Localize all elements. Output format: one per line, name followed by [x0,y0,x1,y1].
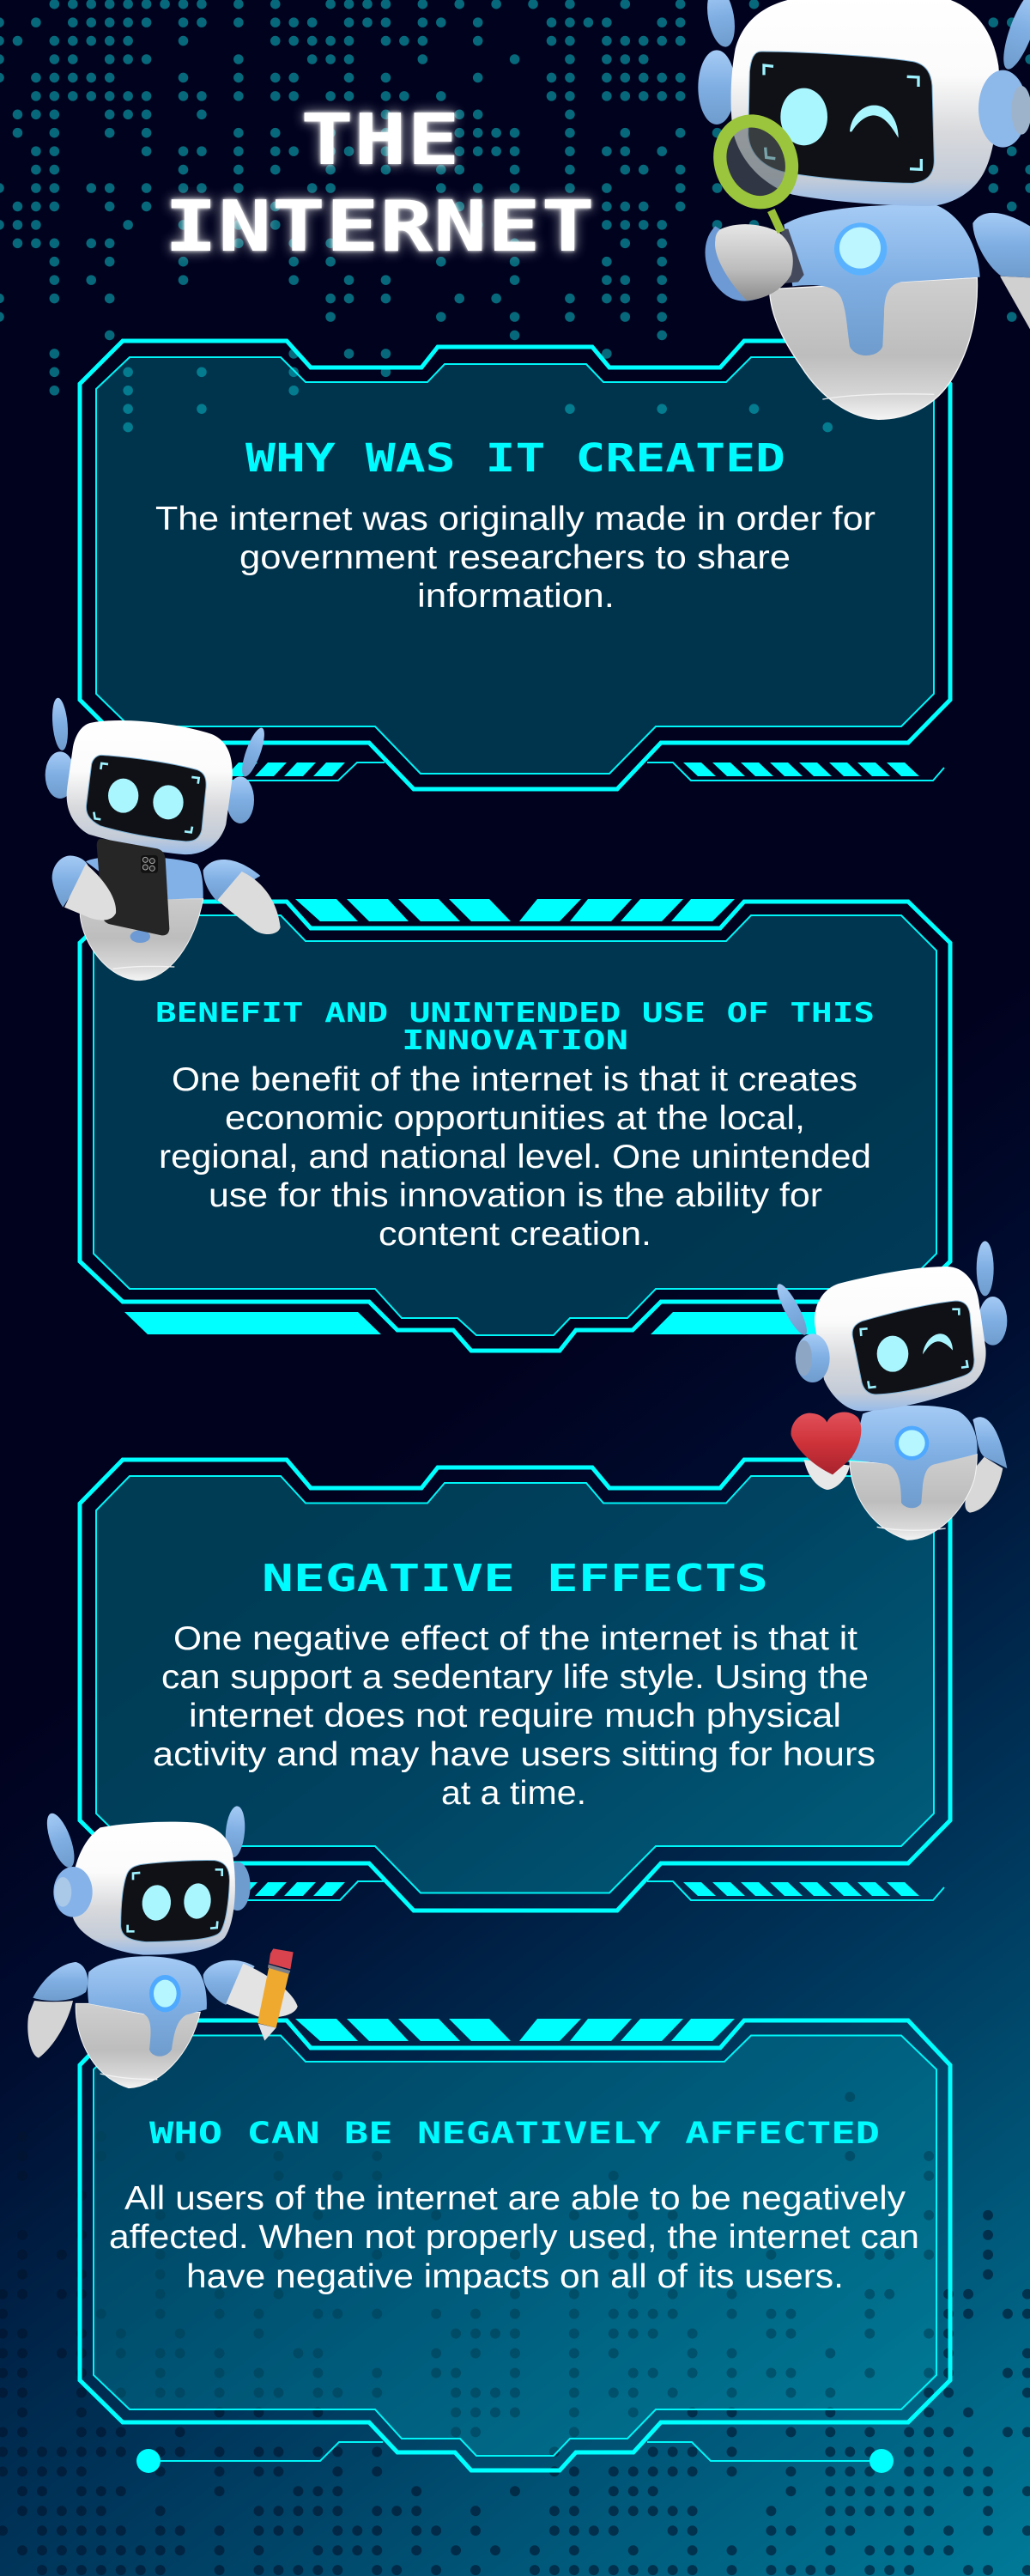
body text: internet does not require much physical [189,1698,841,1735]
title [164,100,595,268]
body text: information. [417,578,615,615]
body text: have negative impacts on all of its users. [186,2258,844,2295]
bottom dot pattern [3,2097,1027,2570]
heading: WHO CAN BE NEGATIVELY AFFECTED [149,2117,880,2151]
body text: use for this innovation is the ability for [209,1177,822,1214]
icon: robot with heart [772,1241,1007,1540]
title: THE [300,100,460,181]
body text: content creation. [379,1216,651,1253]
top dot pattern [0,4,1030,428]
panel: benefit and unintended use [80,899,950,1351]
body text: activity and may have users sitting for hours [153,1736,876,1773]
body text: regional, and national level. One unintended [159,1139,871,1176]
heading: NEGATIVE EFFECTS [262,1557,768,1601]
body text [109,2180,919,2295]
panel: who can be negatively affected [80,2019,950,2473]
body text: government researchers to share [239,539,791,576]
body text: All users of the internet are able to be negatively [124,2180,906,2217]
body text: One negative effect of the internet is that it [173,1620,857,1657]
body text: economic opportunities at the local, [225,1100,805,1137]
heading [155,998,875,1056]
panel: why was it created [80,341,950,789]
icon: robot with magnifying glass [698,0,1030,419]
body text [155,501,876,615]
body text: affected. When not properly used, the internet can [109,2219,919,2256]
body text [153,1620,876,1812]
title: INTERNET [164,186,595,268]
heading: INNOVATION [402,1025,628,1056]
body text [159,1061,871,1253]
icon: robot with phone [45,697,281,981]
circuit line with end dots [136,2442,894,2473]
body text: can support a sedentary life style. Using the [161,1659,869,1696]
body text: The internet was originally made in order for [155,501,876,538]
heading: BENEFIT AND UNINTENDED USE OF THIS [155,998,875,1029]
heading: WHY WAS IT CREATED [245,435,785,481]
body text: One benefit of the internet is that it creates [172,1061,857,1098]
icon: robot with pencil [27,1805,298,2088]
body text: at a time. [441,1775,586,1812]
panel: negative effects [80,1460,950,1911]
